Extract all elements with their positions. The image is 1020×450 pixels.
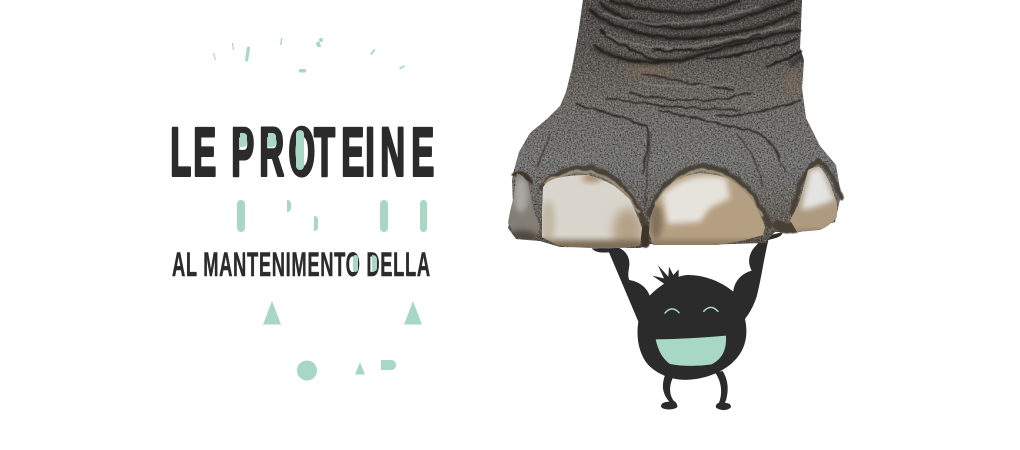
character: [592, 232, 783, 410]
title letter counters: [240, 130, 304, 170]
text line: MUSCOLARE: MUSCOLARE: [175, 347, 420, 391]
foot skin: [508, 0, 841, 248]
line letter counters: [237, 200, 427, 232]
character hair: [652, 265, 679, 284]
brown skin patches: [624, 64, 798, 94]
text line: AL MANTENIMENTO DELLA: AL MANTENIMENTO DELLA: [172, 245, 430, 283]
line letter counters: [353, 255, 377, 272]
heading group: top arched phrase: [213, 38, 405, 72]
letter counter triangles: [263, 301, 422, 324]
title: LE PROTEINE: LE PROTEINE: [170, 114, 434, 191]
text line: CONTRIBUISCONO: [175, 193, 430, 242]
toe cuticle shadows: [514, 160, 841, 244]
letter counter shapes: [297, 360, 396, 380]
toenail: left: [542, 175, 642, 248]
elephant foot: [505, 0, 841, 256]
text line: MASSA: MASSA: [175, 275, 430, 360]
character smile: [656, 336, 726, 366]
wrinkles: [537, 0, 802, 207]
dark wrinkle lines: [590, 0, 802, 67]
arched phrase mint counters: [213, 38, 405, 72]
light wrinkle highlights: [603, 7, 793, 87]
soft wrinkle bands: [590, 0, 805, 65]
toenail: far left: [508, 173, 540, 240]
toenail: right: [790, 166, 837, 232]
toenail: middle: [649, 173, 765, 245]
illustration: character lifting elephant foot: [505, 0, 841, 410]
text line: CONTRIBUISCONO: CONTRIBUISCONO: [175, 193, 430, 242]
character legs and feet: [661, 371, 731, 410]
character eyes: [665, 307, 718, 313]
character body and arms: [592, 232, 783, 380]
